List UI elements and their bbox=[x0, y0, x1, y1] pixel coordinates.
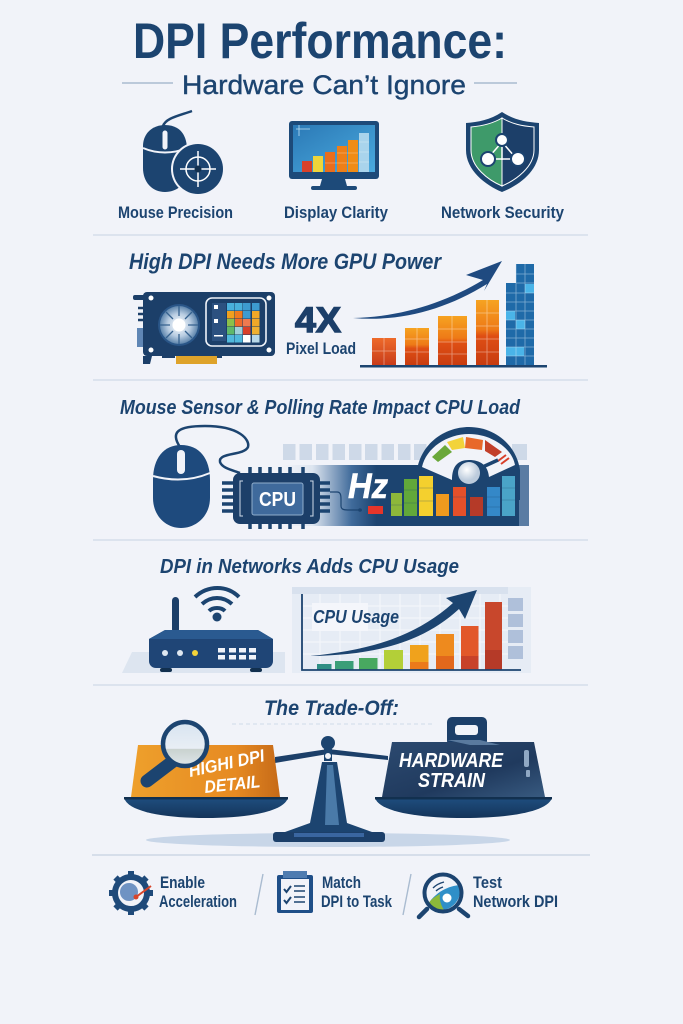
action: enable acceleration: Acceleration bbox=[159, 893, 237, 911]
icon: router with wifi bbox=[122, 588, 285, 673]
icon: mouse with cable bbox=[153, 426, 248, 528]
callout: 4X pixel load bbox=[286, 301, 356, 358]
callout: 4X pixel load: Pixel Load bbox=[286, 339, 356, 358]
label: network security: Network Security bbox=[441, 204, 565, 222]
action: enable acceleration: Enable bbox=[160, 874, 205, 892]
chart: CPU usage bbox=[292, 587, 531, 673]
title: DPI Performance: bbox=[133, 13, 507, 69]
action: test network DPI: Test bbox=[473, 874, 502, 892]
icon: clipboard bbox=[277, 871, 313, 913]
action: match DPI to task bbox=[277, 871, 393, 913]
action: match DPI to task: Match bbox=[322, 874, 361, 892]
heading: polling rate: Mouse Sensor & Polling Rate Impact CPU Load bbox=[120, 397, 521, 419]
callout: 4X pixel load: 4X bbox=[295, 301, 342, 340]
panel: high DPI detail weight: DETAIL bbox=[203, 771, 261, 797]
panel: polling rate gauge and bars bbox=[283, 427, 529, 526]
scale stand and beam bbox=[273, 736, 388, 842]
heading: networks: DPI in Networks Adds CPU Usage bbox=[160, 556, 459, 578]
action: test network DPI bbox=[419, 874, 558, 917]
bar chart: rising GPU load bbox=[360, 264, 547, 368]
action: test network DPI: Network DPI bbox=[473, 893, 558, 911]
connector: CPU to signal block bbox=[330, 492, 383, 514]
icon: CPU chip bbox=[222, 467, 330, 529]
icon: network magnifier bbox=[419, 874, 468, 917]
action: match DPI to task: DPI to Task bbox=[321, 893, 393, 911]
icon: magnifying glass bbox=[147, 722, 207, 781]
icon: mouse precision bbox=[143, 111, 225, 196]
panel: hardware strain weight bbox=[375, 717, 552, 818]
arrow: GPU load growth bbox=[353, 261, 502, 319]
icon: graphics card bbox=[133, 292, 275, 364]
label: display clarity: Display Clarity bbox=[284, 204, 389, 222]
panel: high DPI detail weight: HIGHI DPI bbox=[187, 745, 267, 781]
heading: GPU power: High DPI Needs More GPU Power bbox=[129, 249, 442, 274]
subtitle with side rules: Hardware Can’t Ignore bbox=[182, 70, 466, 100]
icon: network security shield bbox=[466, 112, 539, 192]
label: mouse precision: Mouse Precision bbox=[118, 204, 233, 222]
icon: CPU chip: CPU bbox=[259, 489, 296, 511]
strip of pale squares bbox=[283, 444, 527, 460]
panel: hardware strain weight: STRAIN bbox=[418, 770, 485, 792]
panel: hardware strain weight: HARDWARE bbox=[399, 750, 504, 772]
heading: the trade-off: The Trade-Off: bbox=[264, 697, 399, 720]
label: Hz: Hz bbox=[348, 467, 388, 506]
icon: display clarity bbox=[289, 121, 379, 190]
icon: gear gauge bbox=[109, 871, 153, 915]
label: CPU usage: CPU Usage bbox=[313, 607, 399, 627]
shadow under scale bbox=[146, 833, 510, 847]
panel: high DPI detail weight bbox=[124, 722, 288, 818]
action: enable acceleration bbox=[109, 871, 237, 915]
